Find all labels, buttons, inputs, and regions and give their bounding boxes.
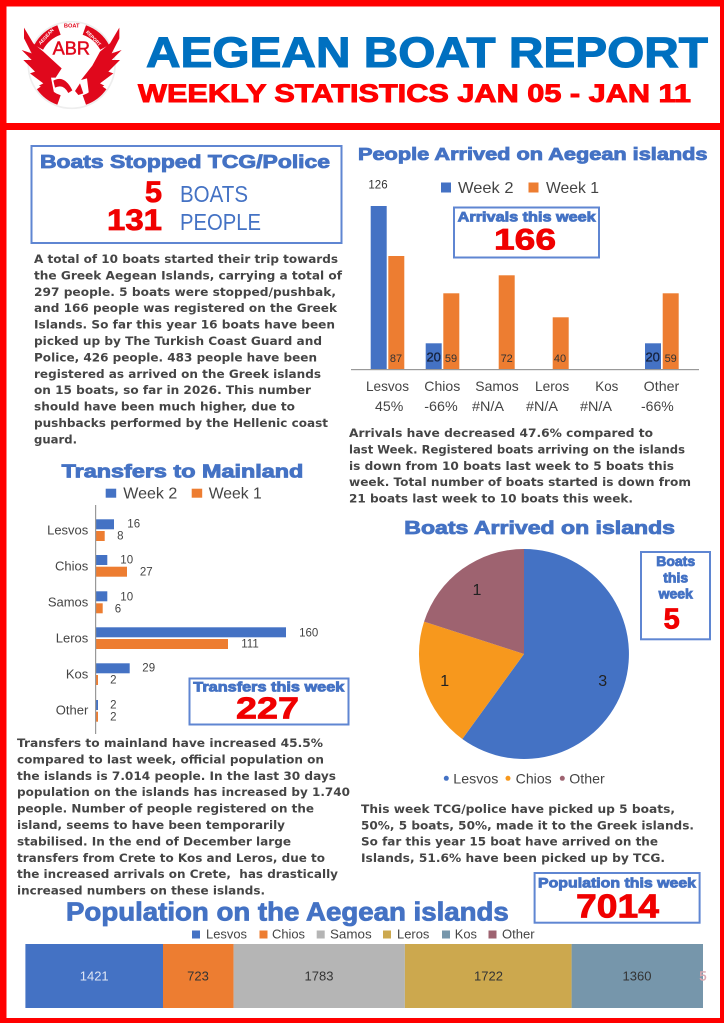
heading: people arrived: People Arrived on Aegean islands [358,144,708,164]
bar chart: transfers: 16 [127,519,140,531]
text block: summary: should have been much higher, due to [34,400,295,414]
text block: transfers: increased numbers on these islands. [17,884,265,898]
pie chart: 1 [473,582,482,599]
stacked bar chart: population: 723 [187,969,209,984]
callout: boats this week: this [663,569,688,585]
icon: ABR logo [22,22,122,108]
text block: boats: Islands, 51.6% have been picked up by TCG. [361,851,665,865]
text block: boats [361,802,694,865]
stacked bar chart: population: 5 [699,969,707,984]
text block: transfers: stabilised. In the end of December large [17,834,291,848]
bar chart: arrivals: Lesvos [366,378,409,394]
bar chart: arrivals: #N/A [580,398,613,414]
text block: summary: picked up by The Turkish Coast Guard and [34,334,322,348]
text block: transfers: island, seems to have been temporarily [17,818,286,832]
callout: transfers this week: 227 [236,690,299,725]
callout: boats this week: 5 [664,603,680,635]
bar chart: arrivals: Kos [595,378,618,394]
text block: summary: and 166 people was registered on the Greek [34,301,337,315]
callout: population this week: 7014 [576,887,660,924]
bar chart: arrivals: -66% [641,398,674,414]
title: AEGEAN BOAT REPORT [146,29,708,77]
bar chart: transfers: 111 [241,639,259,651]
callout: population this week [535,873,700,924]
bar chart: arrivals: 20 [426,350,441,364]
heading: boats stopped: Boats Stopped TCG/Police [40,151,330,172]
stacked bar chart: population: 1722 [474,969,503,984]
text block: boats: This week TCG/police have picked up 5 boats, [361,802,675,816]
bar chart: arrivals [351,180,699,414]
chart legend: Lesvos [453,770,498,786]
heading: boats arrived: Boats Arrived on islands [404,517,675,538]
text block: transfers: population on the islands has increased by 1.740 [17,785,350,799]
bar chart: arrivals: 87 [390,353,402,365]
panel: boats arrived chart [404,517,710,786]
text block: transfers: people. Number of people registered on the [17,802,314,816]
chart legend [441,180,599,197]
text block: summary: the Greek Aegean Islands, carrying a total of [34,268,343,282]
stat: people: 131 [107,204,162,237]
chart legend [192,926,535,941]
bar chart: transfers: 2 [110,711,117,723]
chart legend: Other [502,926,535,941]
text block: arrivals: week. Total number of boats started is down from [349,475,691,489]
stat: boats: 5 [145,176,162,209]
text block: transfers: the islands is 7.014 people. In the last 30 days [17,769,336,783]
stacked bar chart: population [25,944,707,1008]
icon: ABR logo: AEGEAN [38,27,55,46]
bar chart: arrivals: 20 [645,350,660,364]
bar chart: transfers: 10 [120,591,133,603]
bar chart: transfers: Leros [56,631,89,646]
icon: ABR logo: ABR [53,37,90,58]
callout: arrivals this week: Arrivals this week [458,209,596,225]
stacked bar chart: population: 1421 [80,969,109,984]
chart legend [106,485,262,502]
bar chart: transfers: 2 [110,675,117,687]
chart legend: Chios [516,770,552,786]
text block: arrivals: last Week. Registered boats arriving on the islands [349,442,685,456]
callout: boats this week [641,552,710,639]
panel: population [25,873,707,1008]
bar chart: transfers: Kos [66,667,89,682]
bar chart: transfers: 29 [142,663,155,675]
bar chart: transfers: Other [56,703,89,718]
pie chart: 1 [440,673,449,690]
stacked bar chart: population: 1783 [305,969,333,984]
bar chart: arrivals: Other [644,378,680,394]
stat: boats: BOATS [180,181,248,207]
text block: arrivals: Arrivals have decreased 47.6% compared to [349,426,653,440]
bar chart: transfers [47,505,318,734]
bar chart: arrivals: Chios [424,378,460,394]
bar chart: arrivals: 72 [501,353,513,365]
bar chart: arrivals: 59 [665,353,677,365]
bar chart: transfers: Samos [48,595,89,610]
bar chart: arrivals: 59 [445,353,457,365]
callout: arrivals this week [454,208,599,258]
text block: summary: registered as arrived on the Greek islands [34,367,321,381]
text block: transfers: transfers from Crete to Kos and Leros, due to [17,851,325,865]
text block: transfers: Transfers to mainland have increased 45.5% [17,736,324,750]
bar chart: arrivals: #N/A [526,398,559,414]
chart legend [444,770,605,786]
heading: transfers: Transfers to Mainland [62,461,303,481]
chart legend: Leros [397,926,430,941]
heading: population: Population on the Aegean islands [66,897,509,927]
panel: boats stopped [32,146,342,243]
text block: summary: Police, 426 people. 483 people have been [34,350,317,364]
bar chart: arrivals: 45% [375,398,403,414]
bar chart: transfers: 8 [117,531,124,543]
callout: boats this week: Boats [656,553,695,569]
subtitle: WEEKLY STATISTICS JAN 05 - JAN 11 [138,80,691,108]
text block: summary: guard. [34,432,77,446]
bar chart: arrivals: 40 [554,353,566,365]
chart legend: Kos [455,926,477,941]
bar chart: transfers: 6 [115,603,121,615]
chart legend: Week 1 [546,180,599,197]
bar chart: transfers: 10 [120,555,133,567]
bar chart: transfers: 2 [110,699,117,711]
text block: summary: pushbacks performed by the Hellenic coast [34,416,329,430]
pie chart: 3 [598,673,607,690]
callout: transfers this week: Transfers this week [193,679,345,695]
text block: summary [34,252,343,446]
stat: people: PEOPLE [180,209,261,235]
bar chart: arrivals: -66% [424,398,458,414]
stat: people [107,204,261,237]
chart legend: Week 1 [209,485,262,502]
icon: ABR logo: REPORT [85,30,102,47]
text block: transfers [17,736,350,898]
text block: transfers: the increased arrivals on Crete, has drastically [17,867,339,881]
bar chart: arrivals: #N/A [472,398,505,414]
icon: ABR logo: BOAT [64,23,80,29]
bar chart: arrivals: Samos [475,378,519,394]
stat: boats [145,176,248,209]
chart legend: Other [569,770,605,786]
text block: boats: 50%, 5 boats, 50%, made it to the Greek islands. [361,818,694,832]
text block: boats: So far this year 15 boat have arrived on the [361,835,658,849]
chart legend: Samos [330,926,372,941]
text block: summary: on 15 boats, so far in 2026. This number [34,383,311,397]
bar chart: transfers: Lesvos [47,522,89,537]
pie chart [419,549,629,759]
chart legend: Chios [272,926,305,941]
stacked bar chart: population: 1360 [623,969,651,984]
chart legend: Week 2 [458,180,514,197]
bar chart: transfers: 27 [140,566,153,578]
callout: boats this week: week [658,585,693,601]
panel: people arrived chart [351,144,708,414]
bar chart: transfers: 160 [299,627,318,639]
bar chart: arrivals: Leros [535,378,569,394]
chart legend: Week 2 [123,485,177,502]
bar chart: transfers: Chios [55,558,89,573]
callout: arrivals this week: 166 [494,223,556,256]
text block: arrivals: 21 boats last week to 10 boats this week. [349,492,633,506]
chart legend: Lesvos [206,926,247,941]
text block: transfers: compared to last week, official population on [17,752,324,766]
callout: population this week: Population this week [538,874,696,890]
text block: summary: Islands. So far this year 16 boats have been [34,318,335,332]
panel: transfers chart [47,461,349,734]
bar chart: arrivals: 126 [368,180,388,192]
callout: transfers this week [190,678,348,725]
text block: arrivals: is down from 10 boats last week to 5 boats this [349,459,674,473]
text block: summary: 297 people. 5 boats were stopped/pushbak, [34,285,336,299]
text block: arrivals [349,426,691,506]
text block: summary: A total of 10 boats started their trip towards [34,252,338,266]
